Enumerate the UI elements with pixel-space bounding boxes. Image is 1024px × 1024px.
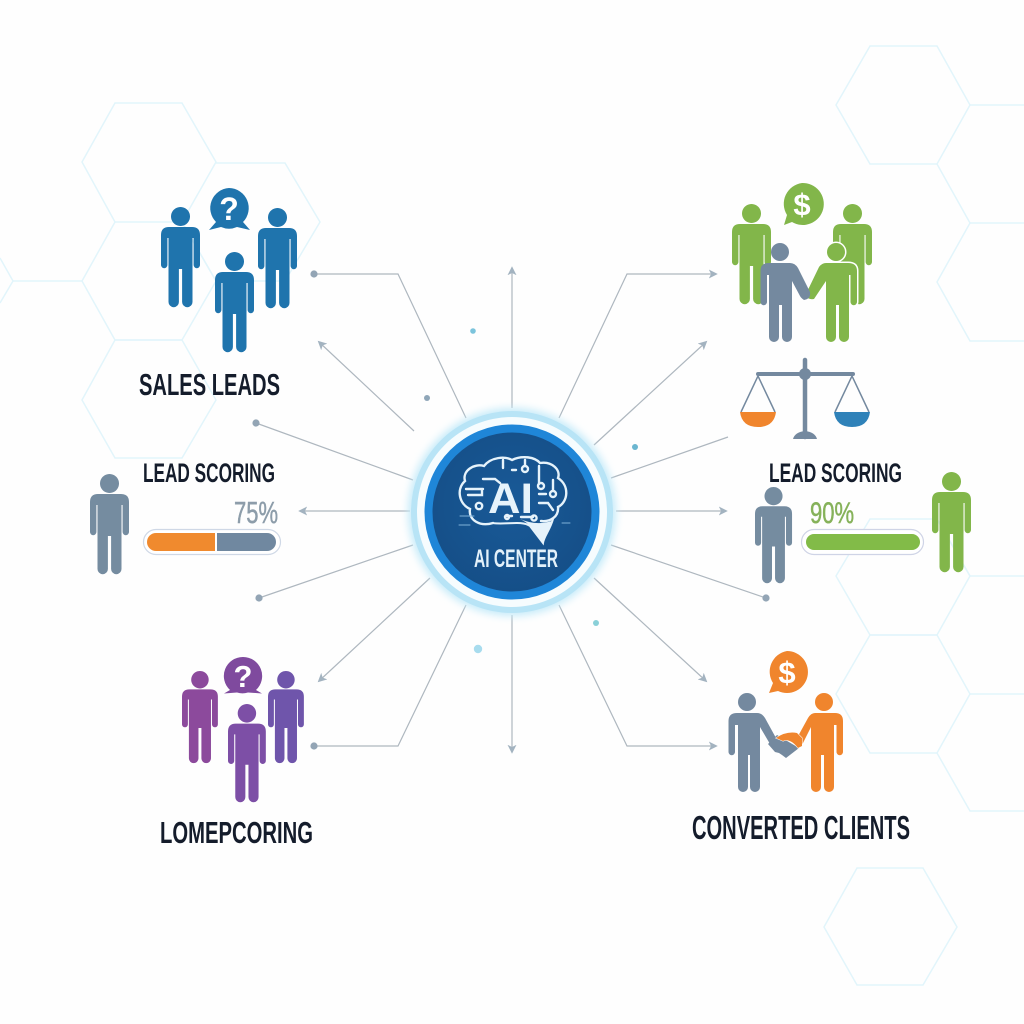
AI center hub [408,408,616,616]
icon: question bubble: ? [234,659,252,694]
value: 90%: 90% [810,497,854,530]
icon: circuit brain [459,457,570,543]
icon: question bubble: ? [219,191,239,227]
icon: balance scale [740,360,870,439]
icon: three blue people [161,207,297,352]
panel: lead scoring prospects [160,657,313,850]
icon: dollar bubble green: $ [793,187,811,222]
heading: lomepcoring: LOMEPCORING [160,815,313,850]
panel: lead scoring right [755,458,971,583]
connector lines and arrows [252,268,770,752]
value: 75%: 75% [234,495,278,530]
icon: question bubble [224,657,262,694]
heading: lead scoring: LEAD SCORING [769,458,902,488]
panel: sales leads [139,188,297,402]
brain label: AI: AI [488,475,533,523]
panel: lead scoring left [90,458,280,574]
icon: dollar bubble green [784,183,824,225]
icon: dollar bubble orange: $ [778,655,796,690]
icon: grey person [755,487,792,583]
icon: handshake pair [728,693,843,792]
hub label: AI CENTER: AI CENTER [474,545,558,573]
icon: grey person [90,474,129,574]
progress bar: 75% [144,530,280,554]
icon: green person [932,472,971,572]
heading: lead scoring: LEAD SCORING [143,458,275,488]
panel: converted clients [692,651,910,846]
heading: sales leads: SALES LEADS [139,367,280,402]
icon: purple people [182,671,304,802]
icon: dollar bubble orange [769,651,808,693]
panel: qualified leads [732,183,872,439]
icon: question bubble [209,188,250,230]
progress bar: 90% [802,530,924,554]
icon: green group with handholding pair [732,204,872,342]
